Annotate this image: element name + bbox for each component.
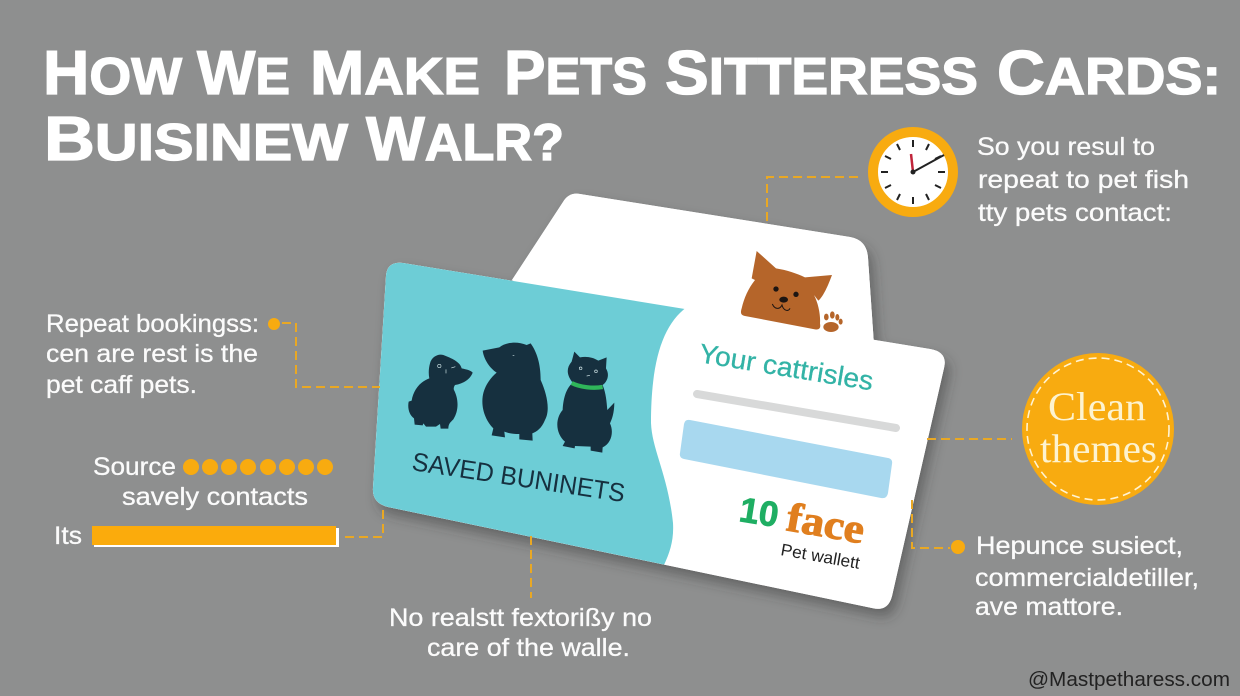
teal panel [373,262,684,564]
card heading: Your cattrisles [697,338,876,396]
dot rating [183,459,333,475]
cat collar [572,383,603,388]
connector: badge [927,438,1012,440]
title [43,39,1221,174]
text: its: Its [54,522,82,550]
text: repeat bookings: Repeat bookingss: [46,310,259,338]
title: BUISINEW [44,105,349,174]
card shadows [373,194,945,609]
text: bottom note: care of the walle. [427,634,630,662]
card label: saved buninets: SAVED BUNINETS [410,446,627,508]
progress bar [92,526,339,547]
title: SITTERESS [665,39,978,108]
connector: clock to card [767,177,858,222]
text: hepunce note: Hepunce susiect, [976,532,1183,560]
icon: large dog silhouette [482,343,548,441]
text: clock note: tty pets contact: [978,199,1172,227]
text: clock note: So you resul to [977,133,1155,161]
text: bottom note: No realstt fextorißy no [389,604,652,632]
text: clock note: repeat to pet fish [978,166,1189,194]
icon: brown dog [741,251,843,332]
text: repeat bookings: cen are rest is the [46,340,258,368]
back card [512,194,874,400]
title: WE [197,39,290,108]
pet wallet: Pet wallett [779,540,862,573]
text: hepunce note: commercialdetiller, [975,564,1199,592]
connector: bottom note [530,536,532,598]
title: PETS [504,39,647,108]
text: clock note [977,133,1189,227]
title: WALR? [366,105,564,174]
blue field [680,420,892,498]
text: hepunce note [975,532,1199,621]
badge: clean themes [1022,353,1174,505]
text: source [93,453,308,511]
credit: @Mastpetharess.com [1028,669,1230,691]
text: source: Source [93,453,176,481]
text: bottom note [389,604,652,662]
text: hepunce note: ave mattore. [975,593,1123,621]
title: CARDS: [997,39,1221,108]
ten face: face [783,494,868,552]
title: MAKE [310,39,480,108]
connector: bar to card [345,505,383,537]
icon: dog silhouette [408,355,473,429]
gray line [697,394,896,428]
connector: repeat bookings [268,318,380,387]
icon: cat silhouette [557,352,614,453]
title: HOW [43,39,183,108]
icon: pet silhouettes [408,343,614,453]
text: repeat bookings [46,310,259,399]
ten face: 10 [737,490,781,535]
connector: hepunce note [912,500,965,554]
badge: clean themes: Clean [1048,384,1146,429]
badge: clean themes: themes [1040,426,1157,471]
text: source: savely contacts [122,483,308,511]
front card [360,240,945,609]
text: repeat bookings: pet caff pets. [46,371,197,399]
ten face [737,490,868,552]
icon: clock [873,132,953,212]
